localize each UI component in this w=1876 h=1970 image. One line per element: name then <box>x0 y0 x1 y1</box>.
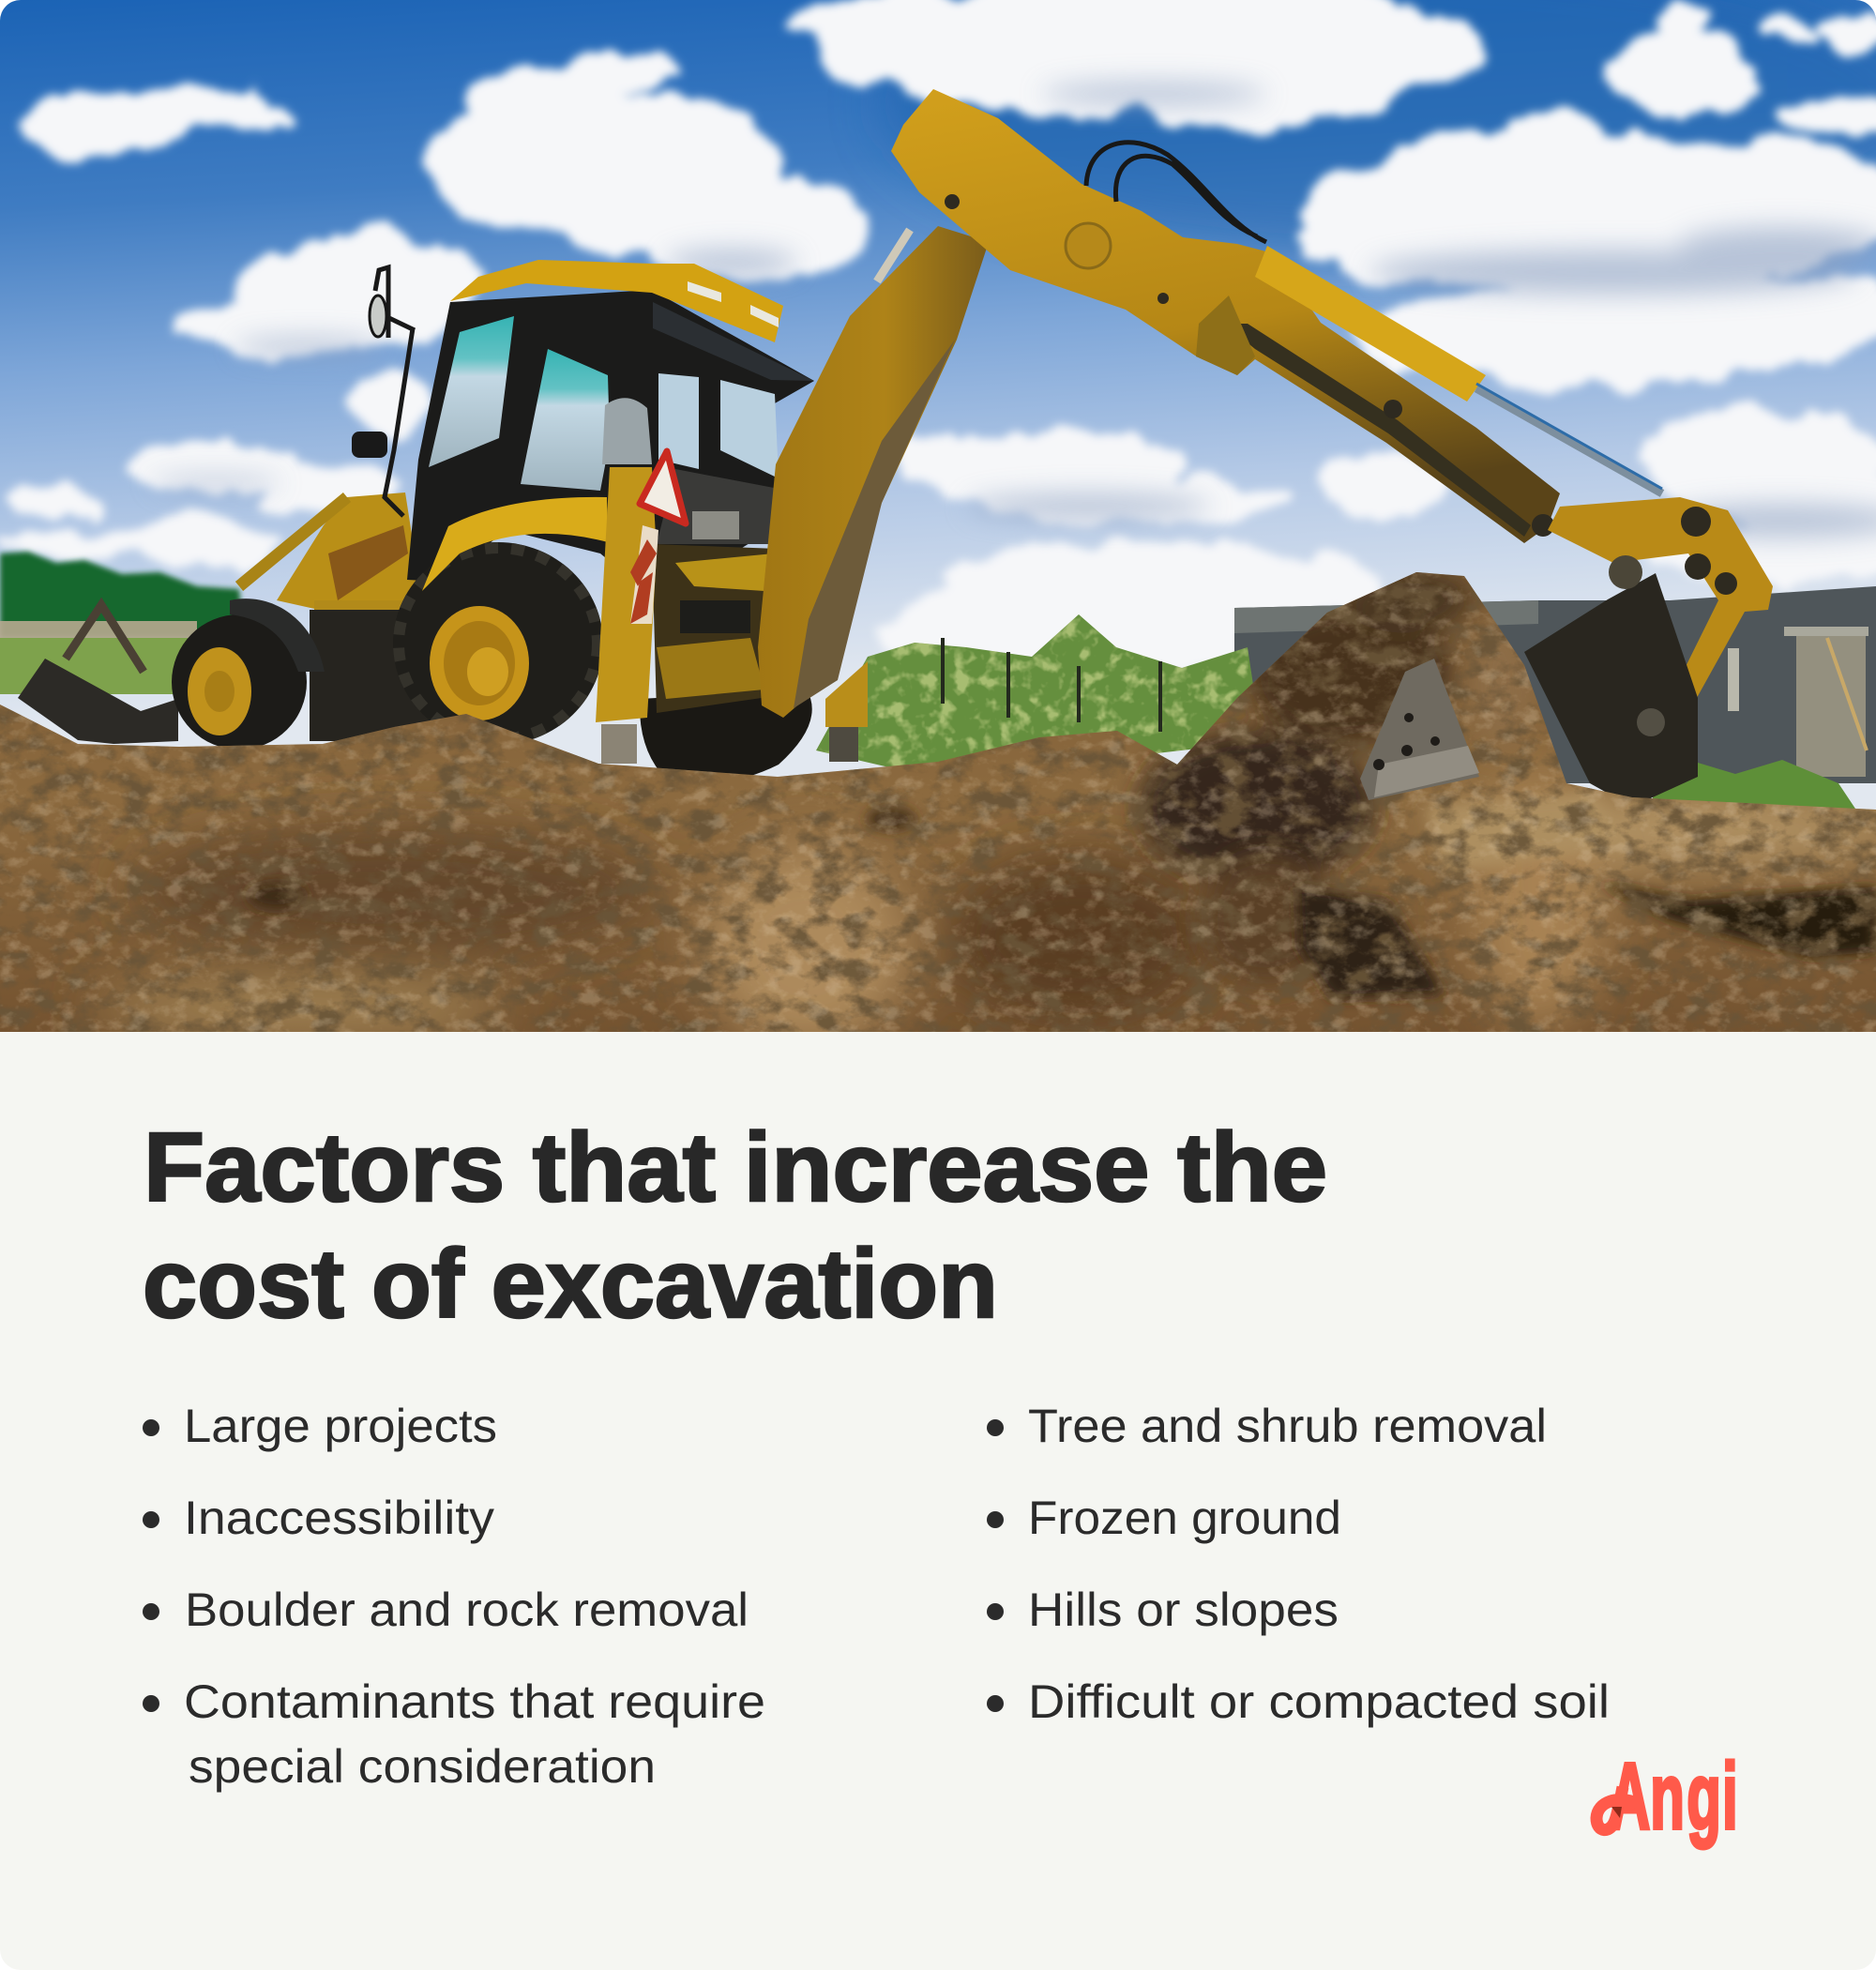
title <box>143 1114 1327 1339</box>
fender <box>422 497 608 591</box>
warning triangle <box>640 451 686 523</box>
list: left column: Contaminants that require <box>184 1675 765 1728</box>
list: left column: Large projects <box>184 1400 497 1452</box>
list: left column <box>143 1400 765 1793</box>
panel: excavator photo <box>0 0 1876 1051</box>
list: left column: Inaccessibility <box>184 1492 494 1544</box>
backhoe <box>18 89 1773 807</box>
title: cost of excavation <box>143 1230 998 1339</box>
front loader bucket <box>18 605 178 744</box>
chassis <box>310 610 430 741</box>
list: right column: Frozen ground <box>1028 1492 1341 1544</box>
upper boom and stick <box>891 89 1560 543</box>
bucket <box>1524 555 1698 807</box>
steel bucket plate showing through the pile <box>1360 659 1479 800</box>
bucket linkage <box>1548 497 1773 713</box>
clouds <box>0 0 1876 677</box>
rear frame and engine <box>596 451 868 764</box>
list: right column: Difficult or compacted soil <box>1028 1675 1610 1728</box>
lower boom <box>758 226 989 718</box>
operator seat <box>602 398 652 464</box>
logo: Angi: Angi <box>1610 1744 1738 1849</box>
engine hood and loader arm <box>234 492 416 610</box>
bushes behind the fence <box>816 610 1857 811</box>
front wheel <box>172 599 325 750</box>
mirror <box>371 267 415 516</box>
hoses <box>1086 143 1266 242</box>
tree line and grass <box>0 552 244 694</box>
title: Factors that increase the <box>144 1114 1327 1222</box>
building <box>1234 586 1876 783</box>
sky <box>0 0 1876 810</box>
list: left column: special consideration <box>189 1740 656 1793</box>
cab roof <box>450 260 783 342</box>
list: right column: Tree and shrub removal <box>1028 1400 1547 1452</box>
excavated soil <box>0 563 1876 1051</box>
list: left column: Boulder and rock removal <box>185 1584 749 1636</box>
list: right column: Hills or slopes <box>1028 1584 1339 1636</box>
cab windows <box>429 316 514 467</box>
cab <box>352 260 814 600</box>
rear wheel <box>393 542 603 745</box>
rear tyre under frame <box>640 690 812 783</box>
list: right column <box>987 1400 1610 1728</box>
hydraulic cylinder <box>1255 246 1486 402</box>
